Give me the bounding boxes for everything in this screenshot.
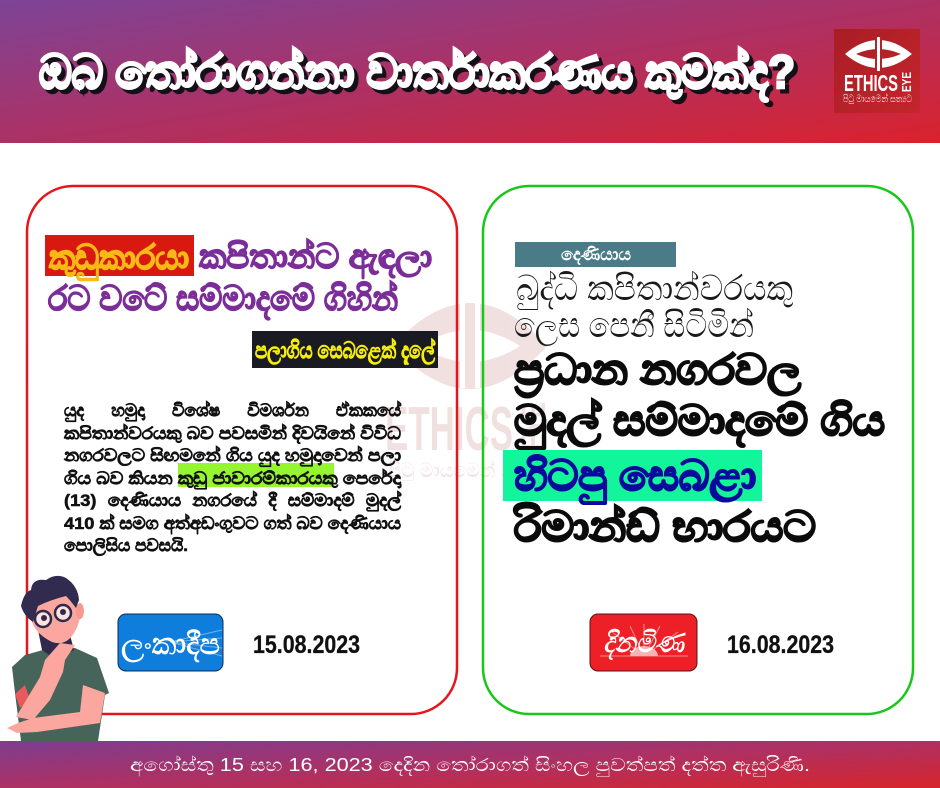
- lower arm: [7, 685, 105, 733]
- hair: [21, 576, 79, 622]
- panel: Dinamina report (green frame): [483, 186, 913, 714]
- logo: Ethics Eye: EYE: [899, 72, 914, 92]
- shirt: [12, 648, 109, 741]
- article body text: පොලිසිය පවසයි.: [64, 536, 188, 557]
- article body text: 410 ක් සමග අත්අඩංගුවට ගත් බව දෙණියාය: [64, 513, 401, 535]
- date: 15.08.2023: [253, 631, 360, 659]
- face: [30, 593, 81, 643]
- location label: [515, 242, 676, 267]
- watermark: Ethics Eye logo: පිටු මායමෙන් සත්‍යට: [388, 459, 553, 482]
- Lankadeepa logo: ලංකාදීප: [121, 628, 220, 662]
- sub headline on black label: පලාගිය සෙබළෙක් දැලේ: [255, 337, 436, 365]
- date: 16.08.2023: [727, 631, 834, 659]
- title: ඔබ තෝරාගන්නා වාර්තාකරණය කුමක්ද?: [43, 49, 799, 106]
- title: ඔබ තෝරාගන්නා වාර්තාකරණය කුමක්ද?: [39, 45, 795, 102]
- Dinamina logo: [590, 614, 697, 671]
- panel: Lankadeepa report (red frame): [27, 186, 457, 714]
- footer source text: අගෝස්තු 15 සහ 16, 2023 දෙදින තෝරාගත් සිංහල පුවත්පත් දත්ත ඇසුරිණි.: [130, 755, 810, 777]
- forearm and hand on chin: [16, 643, 75, 720]
- headline: මුදල් සම්මාදමේ ගිය: [514, 397, 885, 449]
- article body text: නගරවලට සිඟමනේ ගිය යුද හමුදාවෙන් පලා: [63, 445, 401, 467]
- sub headline on black label: [252, 331, 438, 368]
- Dinamina logo: දිනමිණ: [603, 627, 685, 660]
- headline: රිමාන්ඩ් භාරයට: [513, 502, 816, 550]
- article body text: ගිය බව කියන කුඩු ජාවාරම්කාරයකු පෙරේදා: [64, 468, 402, 490]
- kicker text: [514, 269, 794, 347]
- watermark: Ethics Eye logo: ETHICS: [385, 395, 513, 464]
- headline text: රට වටේ සම්මාදමේ ගිහින්: [48, 279, 398, 320]
- footer banner: [0, 741, 940, 788]
- highlighted headline: former soldier: හිටපු සෙබළා: [514, 452, 756, 505]
- kicker text: ලෙස පෙනී සිටිමින්: [514, 306, 754, 347]
- headline text: කපිතාන්ට ඇඳලා: [199, 237, 432, 279]
- logo: Ethics Eye: ETHICS: [844, 70, 898, 96]
- logo: Ethics Eye: [834, 29, 920, 113]
- article body text: යුද හමුදා විශේෂ විමර්ශන ඒකකයේ: [64, 400, 402, 422]
- watermark: Ethics Eye logo: EYE: [515, 402, 553, 450]
- glasses: [35, 605, 71, 627]
- article body text: කපිතාන්වරයකු බව පවසමින් දිවයිනේ විවිධ: [64, 423, 401, 445]
- header banner: [0, 0, 940, 143]
- location label: දෙණියාය: [561, 245, 631, 266]
- article body text: (13) දෙණියාය නගරයේ දී සම්මාදම් මුදල්: [64, 490, 402, 512]
- headline: [513, 346, 885, 550]
- headline: ප්‍රධාන නගරවල: [514, 346, 801, 399]
- Lankadeepa logo: [118, 614, 223, 671]
- article body text: [63, 400, 402, 557]
- illustration: thinking man with glasses: [7, 576, 109, 741]
- neck: [38, 630, 74, 660]
- headline highlight: kudu karaya: කුඩුකාරයා: [49, 239, 189, 280]
- headline text: [48, 237, 432, 320]
- highlight: kudu javaramkarayaku: [178, 463, 334, 487]
- logo: Ethics Eye: පිටු මායමෙන් සත්‍යට: [843, 92, 912, 105]
- kicker text: බුද්ධි කපිතාන්වරයකු: [516, 269, 794, 310]
- watermark: Ethics Eye logo: [385, 303, 553, 482]
